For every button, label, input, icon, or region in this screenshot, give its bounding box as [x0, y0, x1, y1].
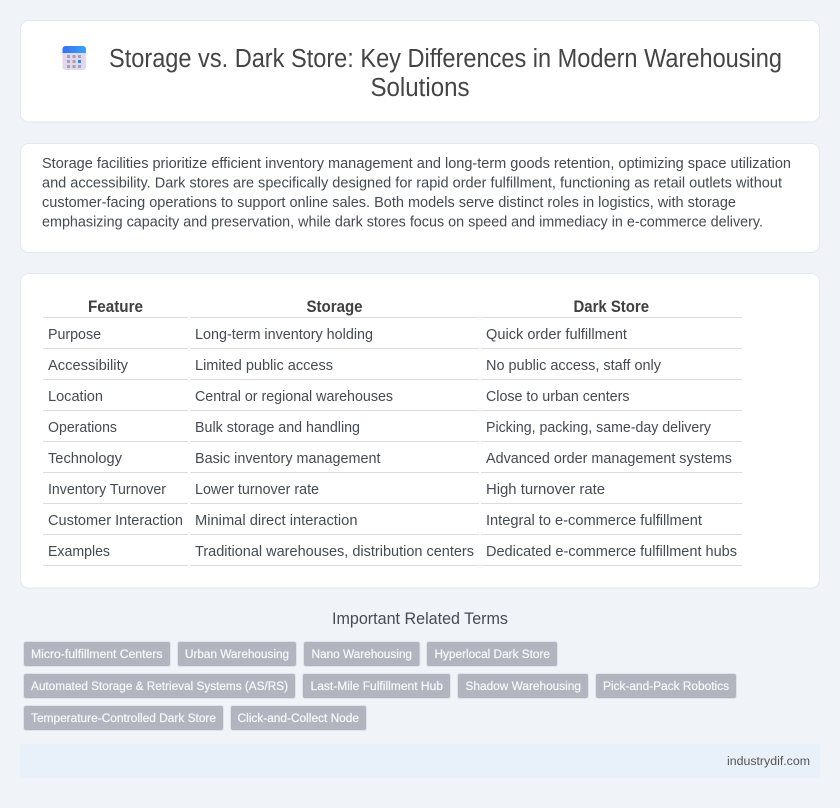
- title: Solutions: [370, 74, 470, 102]
- row: Examples: Dedicated e-commerce fulfillment hubs: [486, 544, 737, 560]
- tag: Pick-and-Pack Robotics: Pick-and-Pack Robotics: [603, 679, 729, 693]
- row: Technology: Technology: [48, 451, 123, 467]
- row: Location: Location: [48, 389, 103, 405]
- tag: Automated Storage & Retrieval Systems (AS/RS): [24, 674, 296, 698]
- tag: Temperature-Controlled Dark Store: [24, 706, 224, 730]
- row: Technology: Basic inventory management: [195, 451, 380, 467]
- row: Customer Interaction: Minimal direct interaction: [195, 513, 358, 529]
- row: Inventory Turnover: High turnover rate: [486, 482, 605, 498]
- title: [109, 45, 782, 102]
- header panel: [20, 20, 820, 122]
- row: Location: Close to urban centers: [486, 389, 630, 405]
- summary panel: [20, 144, 820, 252]
- footer source text: industrydif.com: [727, 754, 810, 768]
- tag: Micro-fulfillment Centers: Micro-fulfillment Centers: [31, 647, 162, 661]
- table header: [88, 298, 649, 316]
- row: Purpose: Purpose: [48, 327, 101, 343]
- row: Accessibility: Accessibility: [48, 358, 129, 374]
- row: Technology: [48, 451, 732, 467]
- title: Storage vs. Dark Store: Key Differences in Modern Warehousing: [109, 45, 782, 73]
- row: Location: [48, 389, 630, 405]
- summary paragraph: and accessibility. Dark stores are specifically designed for rapid order fulfillment, functioning as retail outlets without: [42, 176, 782, 192]
- row: Purpose: Quick order fulfillment: [486, 327, 627, 343]
- summary paragraph: Storage facilities prioritize efficient inventory management and long-term goods retention, optimizing space utilization: [42, 156, 791, 172]
- row: Inventory Turnover: Lower turnover rate: [195, 482, 319, 498]
- tag: Pick-and-Pack Robotics: [596, 674, 736, 698]
- row: Inventory Turnover: Inventory Turnover: [48, 482, 166, 498]
- row: Operations: Picking, packing, same-day delivery: [486, 420, 712, 436]
- row: Accessibility: Limited public access: [195, 358, 333, 374]
- row: Examples: Examples: [48, 544, 110, 560]
- tag: Shadow Warehousing: [458, 674, 588, 698]
- tag: Micro-fulfillment Centers: [24, 642, 170, 666]
- row: Location: Central or regional warehouses: [195, 389, 393, 405]
- row: Operations: Operations: [48, 420, 117, 436]
- summary paragraph: [42, 156, 791, 230]
- row: Technology: Advanced order management systems: [486, 451, 732, 467]
- row: Customer Interaction: Integral to e-commerce fulfillment: [486, 513, 702, 529]
- table header: Storage: [306, 298, 362, 316]
- tag: Last-Mile Fulfillment Hub: Last-Mile Fulfillment Hub: [310, 679, 443, 693]
- row: Operations: Bulk storage and handling: [195, 420, 360, 436]
- tag: Nano Warehousing: Nano Warehousing: [312, 647, 412, 661]
- row: Customer Interaction: [48, 513, 702, 529]
- related terms heading: Important Related Terms: [332, 610, 508, 628]
- tag: Shadow Warehousing: Shadow Warehousing: [466, 679, 581, 693]
- row: Purpose: Long-term inventory holding: [195, 327, 373, 343]
- table header: Feature: [88, 298, 143, 316]
- tag: Nano Warehousing: [304, 642, 420, 666]
- tag: Last-Mile Fulfillment Hub: [302, 674, 450, 698]
- tag: Urban Warehousing: [178, 642, 296, 666]
- tag: Click-and-Collect Node: [230, 706, 366, 730]
- row: Examples: Traditional warehouses, distribution centers: [195, 544, 474, 560]
- row: Customer Interaction: Customer Interaction: [48, 513, 183, 529]
- row: Accessibility: [48, 358, 662, 374]
- comparison table panel: [20, 274, 820, 588]
- summary paragraph: customer-facing operations to support online sales. Both models serve distinct roles in logistics, with storage: [42, 195, 736, 211]
- tag: Click-and-Collect Node: Click-and-Collect Node: [238, 711, 359, 725]
- related term tags: [24, 642, 736, 730]
- tag: Hyperlocal Dark Store: [426, 642, 558, 666]
- row: Operations: [48, 420, 712, 436]
- footer bar: [20, 744, 820, 778]
- row: Purpose: [48, 327, 627, 343]
- row: Examples: [48, 544, 737, 560]
- icon: calendar grid: [62, 46, 86, 70]
- table header: Dark Store: [574, 298, 649, 316]
- tag: Hyperlocal Dark Store: Hyperlocal Dark Store: [434, 647, 550, 661]
- tag: Temperature-Controlled Dark Store: Temperature-Controlled Dark Store: [31, 711, 216, 725]
- row: Inventory Turnover: [48, 482, 605, 498]
- row: Accessibility: No public access, staff only: [486, 358, 662, 374]
- tag: Urban Warehousing: Urban Warehousing: [185, 647, 289, 661]
- summary paragraph: emphasizing capacity and preservation, while dark stores focus on speed and immediacy in e-commerce delivery.: [42, 214, 763, 230]
- tag: Automated Storage & Retrieval Systems (AS/RS): Automated Storage & Retrieval Systems (AS/RS): [31, 679, 288, 693]
